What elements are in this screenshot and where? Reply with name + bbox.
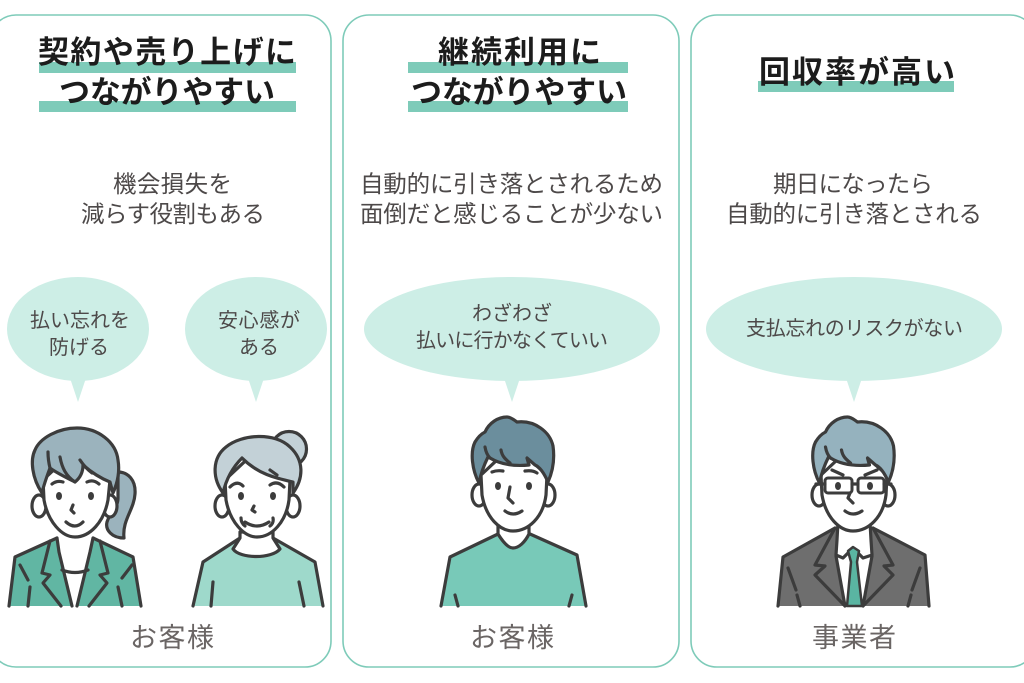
footer label: お客様 <box>470 623 554 653</box>
speech bubble: forgetting payment <box>7 277 149 402</box>
panel: contract and sales <box>0 15 331 667</box>
icon: woman in green jacket <box>8 428 142 606</box>
icon: man in green shirt <box>440 417 587 606</box>
heading <box>38 35 296 112</box>
description text: 機会損失を <box>113 171 232 197</box>
heading: つながりやすい <box>411 75 627 110</box>
speech bubble: no risk of forgetting <box>706 277 1002 402</box>
panel: continued use <box>343 15 679 667</box>
description text <box>360 171 663 227</box>
speech bubble: no need to go and pay: 払いに行かなくていい <box>416 329 608 352</box>
icon: businessman with glasses <box>777 417 930 606</box>
description text: 自動的に引き落とされる <box>726 201 982 227</box>
heading: つながりやすい <box>59 75 275 110</box>
description text: 面倒だと感じることが少ない <box>360 201 663 227</box>
description text: 期日になったら <box>773 171 933 197</box>
speech bubble: peace of mind <box>185 277 327 402</box>
speech bubble: no need to go and pay: わざわざ <box>472 301 552 325</box>
heading <box>408 35 628 112</box>
panel frame <box>691 15 1024 667</box>
footer label: 事業者 <box>812 623 896 653</box>
description text <box>726 171 982 227</box>
heading: 契約や売り上げに <box>38 35 296 70</box>
footer label: お客様 <box>130 623 214 653</box>
panel frame <box>0 15 331 667</box>
icon: older woman in light green sweater <box>193 432 323 606</box>
speech bubble: no need to go and pay <box>364 277 660 402</box>
panel frame <box>343 15 679 667</box>
speech bubble: forgetting payment: 防げる <box>49 336 109 359</box>
description text: 減らす役割もある <box>81 201 265 227</box>
speech bubble: peace of mind: ある <box>239 337 279 359</box>
speech bubble: forgetting payment: 払い忘れを <box>30 309 130 332</box>
description text <box>81 171 265 227</box>
panel: high collection rate <box>691 15 1024 667</box>
heading: 継続利用に <box>438 35 601 70</box>
speech bubble: peace of mind: 安心感が <box>218 309 300 332</box>
heading: 回収率が高い <box>759 55 955 90</box>
speech bubble: no risk of forgetting: 支払忘れのリスクがない <box>746 317 963 340</box>
description text: 自動的に引き落とされるため <box>360 171 663 197</box>
